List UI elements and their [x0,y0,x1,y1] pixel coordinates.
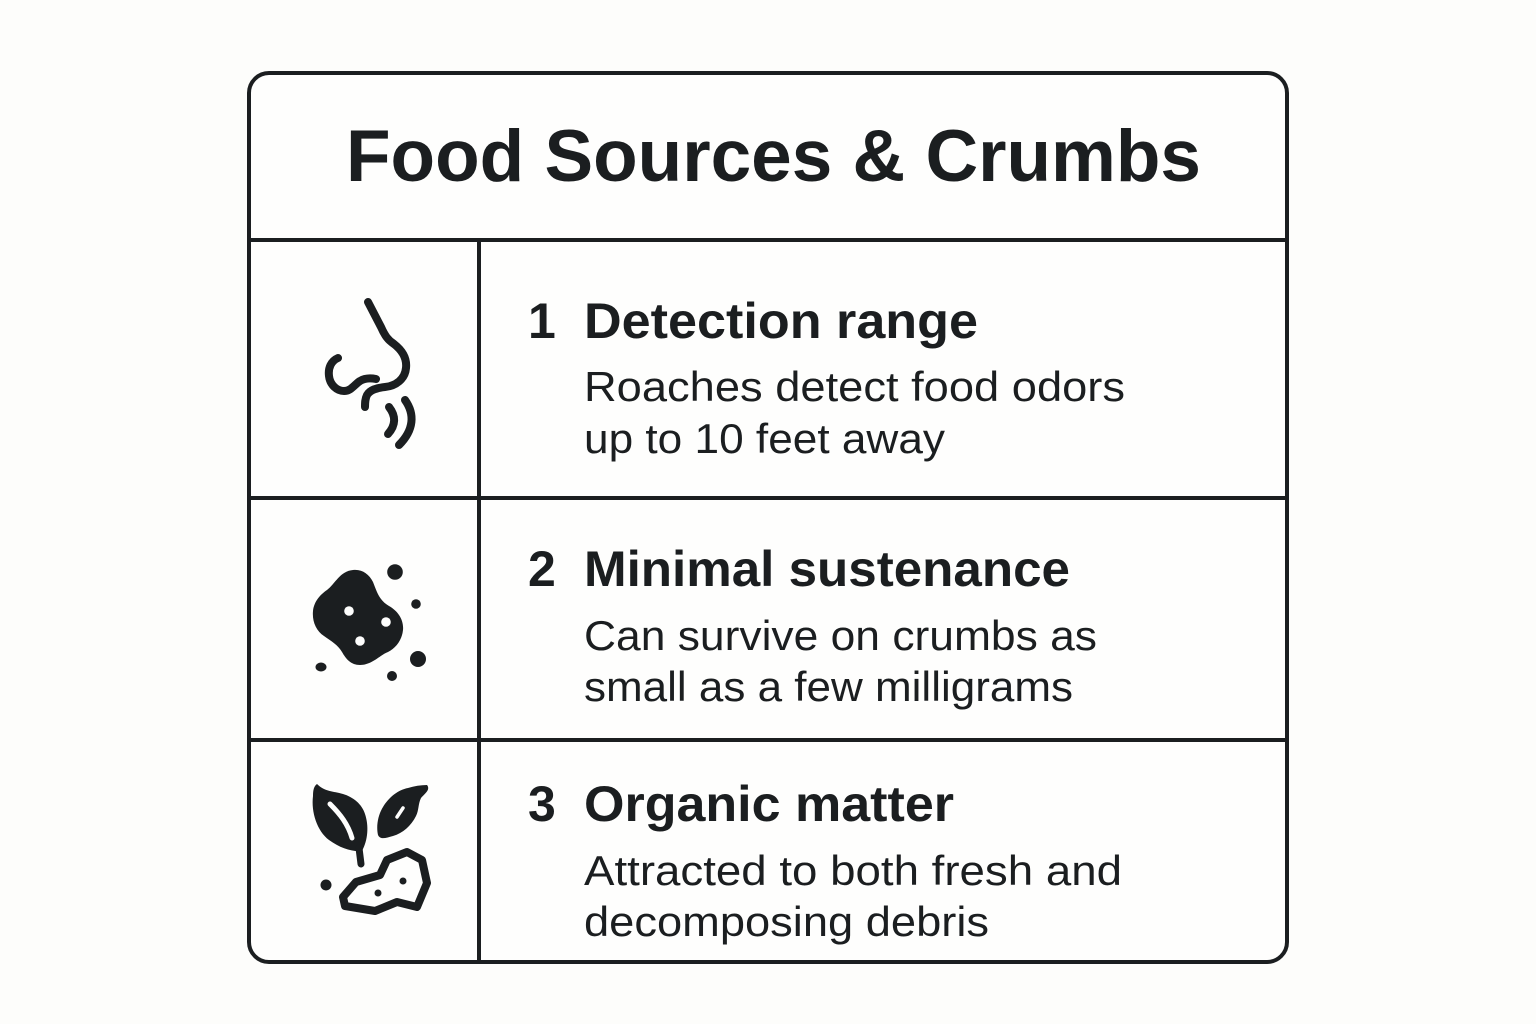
row 2 text: 2 [528,541,556,597]
icon: nose with scent waves [329,302,412,445]
row 2 text [528,541,1097,710]
row 3 text: Attracted to both fresh and [584,847,1122,894]
icon: leaves and organic debris [313,784,428,911]
row 3 text [528,776,1122,945]
row 2 text: Minimal sustenance [584,541,1070,597]
row 1 text: Detection range [584,293,978,349]
row 3 text: 3 [528,776,556,832]
icon: crumb [313,564,426,681]
row 1 text: Roaches detect food odors [584,363,1125,410]
title: Food Sources & Crumbs [346,116,1201,197]
row 2 text: small as a few milligrams [584,663,1073,710]
row 2 text: Can survive on crumbs as [584,612,1097,659]
row 1 text [528,293,1125,462]
row 1 text: 1 [528,293,556,349]
row 1 text: up to 10 feet away [584,415,945,462]
row 3 text: decomposing debris [584,898,989,945]
row 3 text: Organic matter [584,776,954,832]
panel: table frame [249,73,1287,962]
